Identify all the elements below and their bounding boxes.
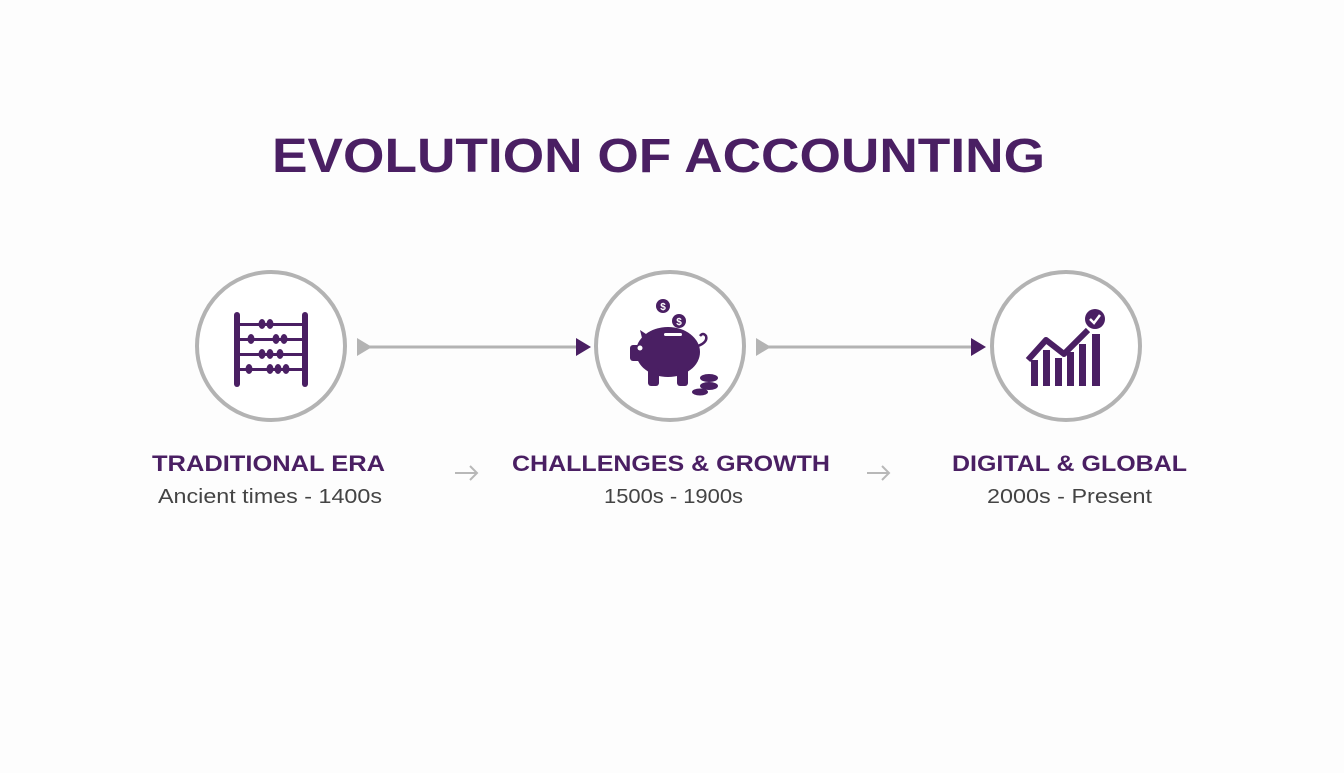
label: digital & global: 2000s - Present [987, 486, 1153, 508]
small arrow 2 [867, 466, 889, 480]
label: traditional era [152, 451, 385, 508]
circle: challenges & growth: $ [676, 317, 682, 328]
arrow: 2 to 3 [756, 338, 986, 356]
icon: piggy bank [630, 299, 718, 396]
circle: challenges & growth: $ [660, 302, 666, 313]
label: challenges & growth: 1500s - 1900s [604, 486, 743, 508]
circle: digital & global [992, 272, 1140, 420]
icon: growth chart with check [1028, 309, 1105, 386]
icon: abacus [234, 312, 308, 387]
label: challenges & growth: CHALLENGES & GROWTH [512, 451, 830, 476]
label: digital & global: DIGITAL & GLOBAL [952, 451, 1187, 476]
label: digital & global [952, 451, 1187, 508]
label: traditional era: TRADITIONAL ERA [152, 451, 385, 476]
title: EVOLUTION OF ACCOUNTING [272, 130, 1045, 183]
label: traditional era: Ancient times - 1400s [158, 486, 382, 508]
small arrow 1 [455, 466, 477, 480]
label: challenges & growth [512, 451, 830, 508]
circle: challenges & growth [596, 272, 744, 420]
circle: traditional era [197, 272, 345, 420]
arrow: 1 to 2 [357, 338, 591, 356]
